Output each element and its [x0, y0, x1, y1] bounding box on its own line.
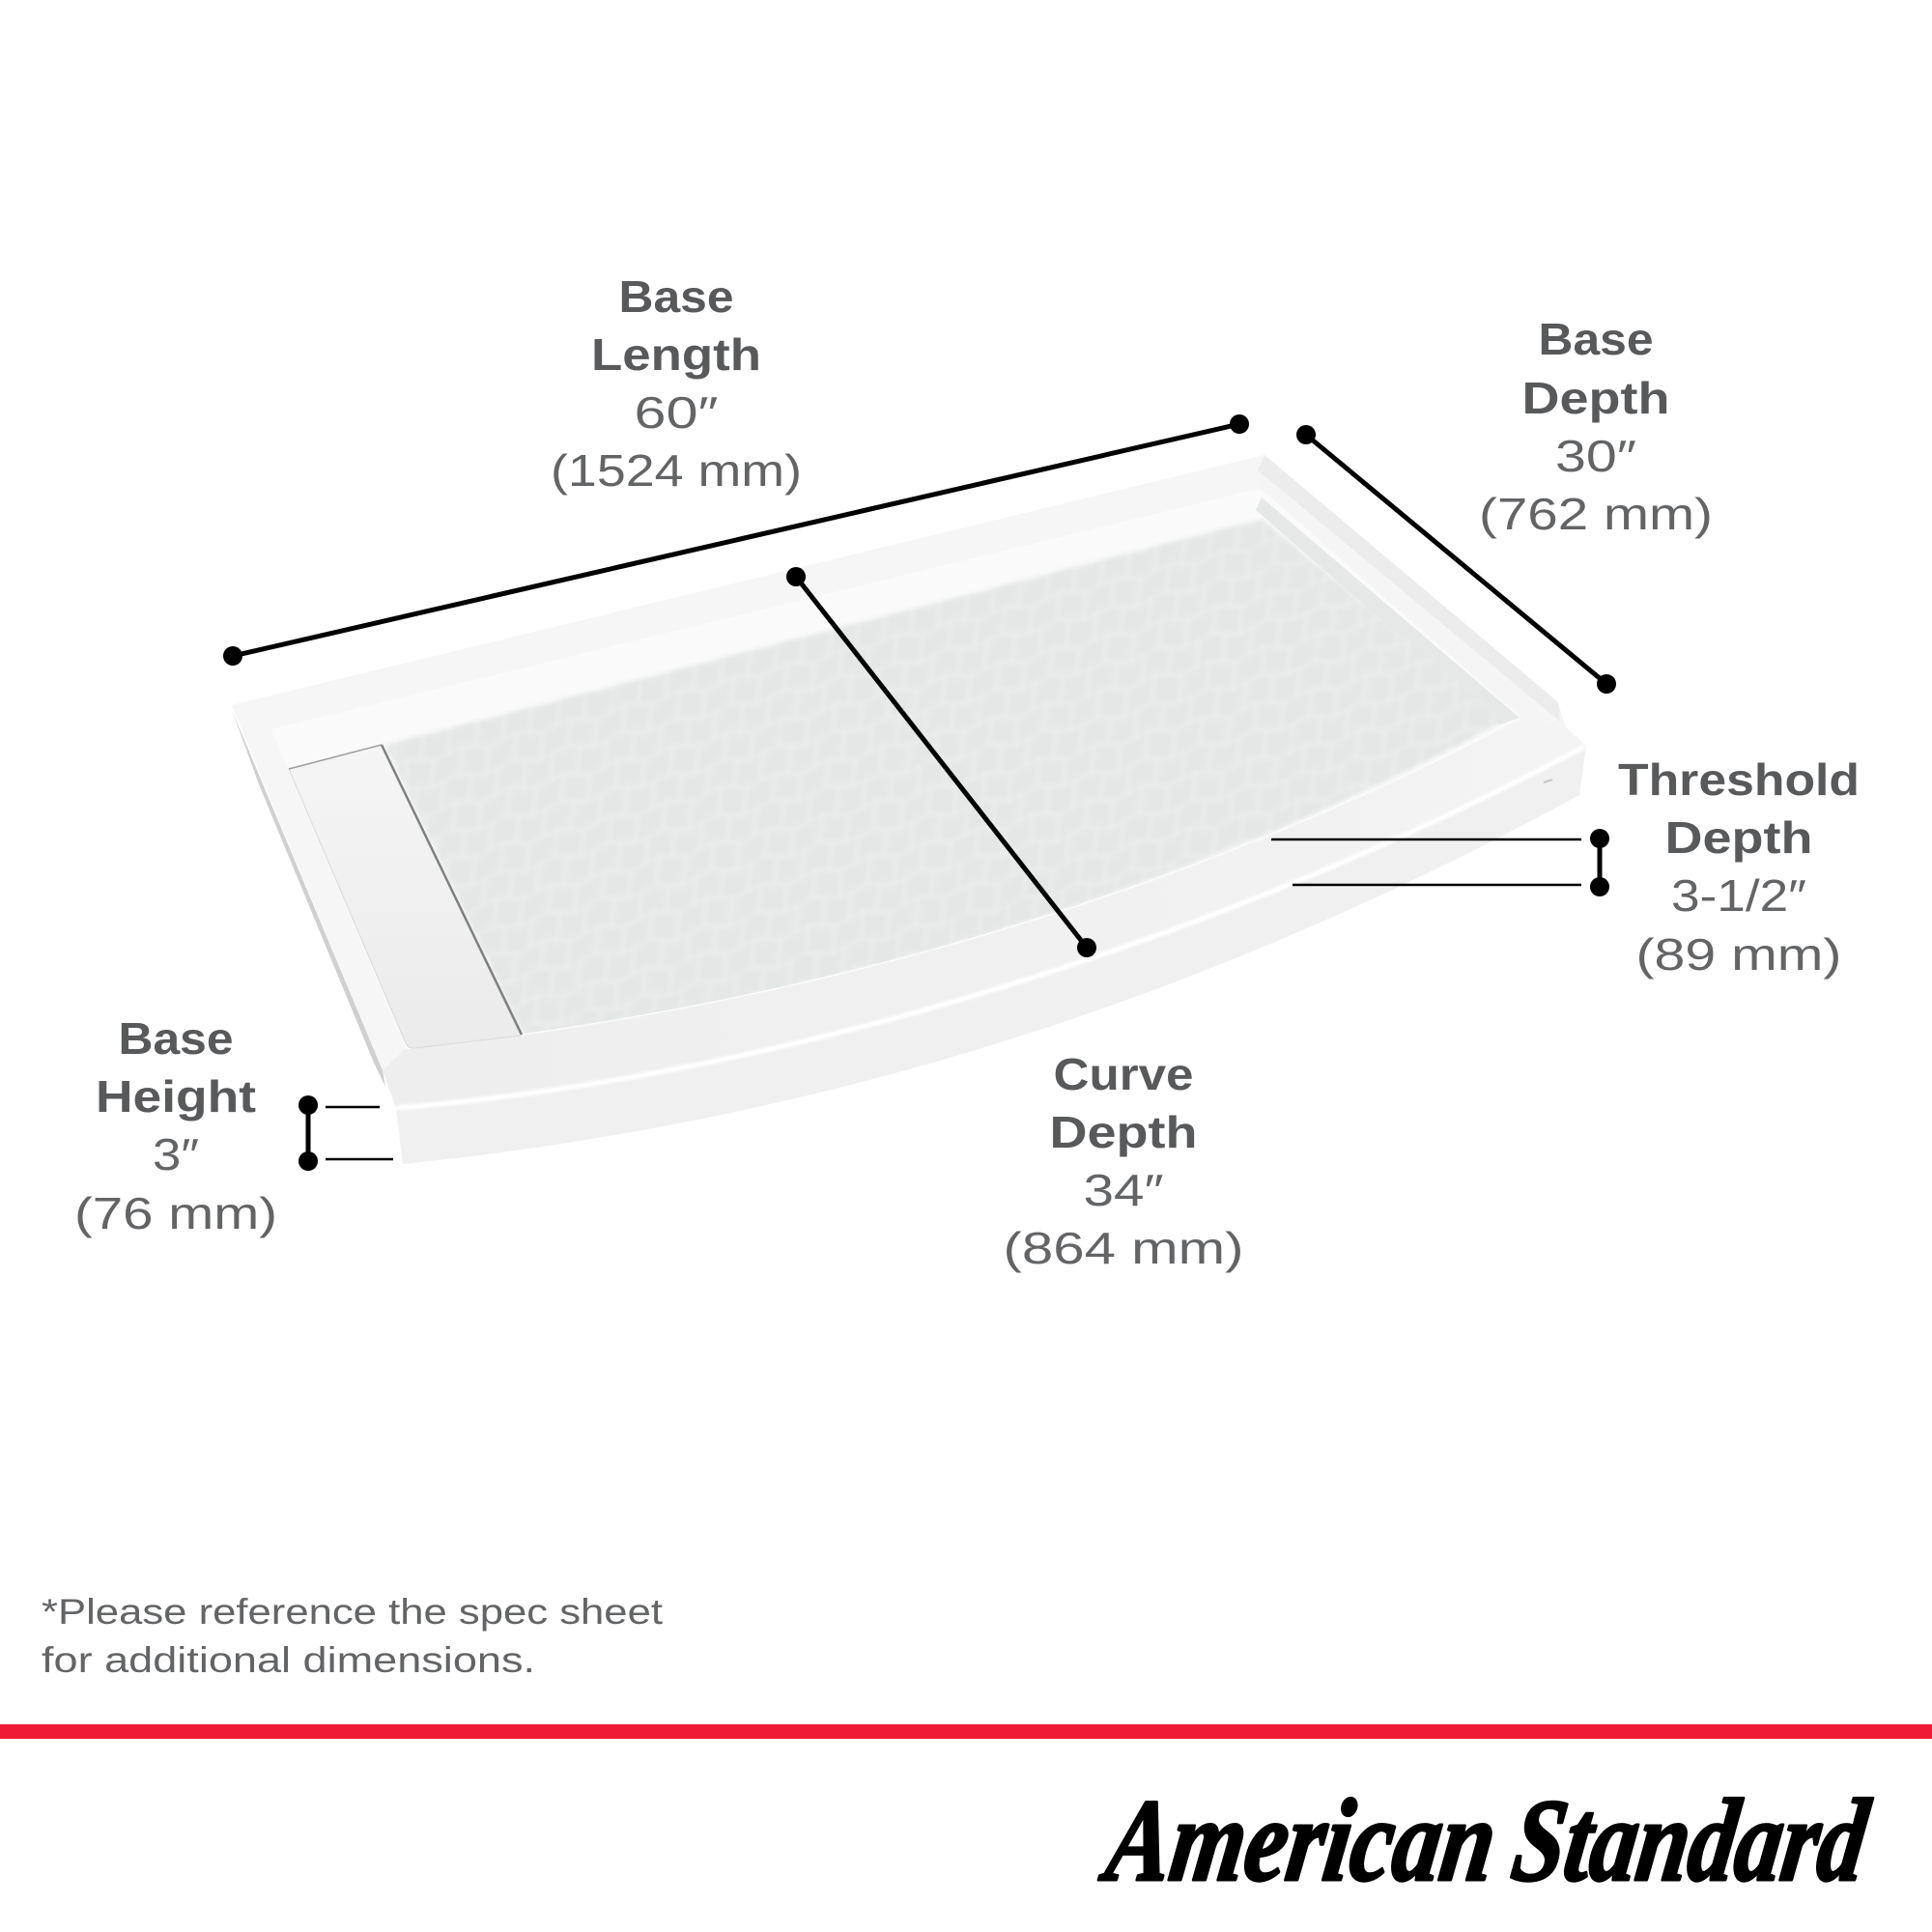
label: threshold depth: (89 mm): [1636, 929, 1841, 980]
label: base depth: 30″: [1555, 431, 1636, 481]
label: base length: Base: [618, 271, 734, 322]
label: base depth: Base: [1538, 314, 1654, 364]
drain slit: [382, 745, 522, 1035]
footnote: for additional dimensions.: [42, 1640, 535, 1680]
dimension bracket: threshold depth: [1271, 829, 1609, 896]
label: base length: [551, 271, 802, 496]
label: base length: (1524 mm): [551, 445, 802, 496]
recessed slope: [273, 490, 1520, 1048]
footnote: *Please reference the spec sheet: [42, 1592, 664, 1632]
label: base height: 3″: [153, 1129, 199, 1179]
front lip: [396, 746, 1586, 1164]
label: base depth: Depth: [1522, 373, 1669, 423]
dimension line: curve depth: [786, 567, 1096, 957]
logo: American Standard: [1094, 1776, 1877, 1906]
label: curve depth: Depth: [1049, 1107, 1198, 1157]
dimension bracket: base height: [298, 1095, 393, 1171]
logo: American Standard: American: [1094, 1776, 1504, 1906]
base outer top and front surface: [232, 455, 1586, 1164]
label: base height: Height: [96, 1071, 256, 1122]
label: threshold depth: [1618, 754, 1860, 980]
label: curve depth: Curve: [1053, 1049, 1194, 1099]
dimension line: base depth: [1296, 425, 1616, 694]
right rim outer band: [1258, 455, 1560, 722]
label: curve depth: (864 mm): [1003, 1223, 1244, 1273]
right inner shadow band: [1256, 497, 1520, 724]
label: base length: 60″: [634, 387, 719, 438]
front lip highlight: [396, 747, 1584, 1108]
right rim top: [1258, 470, 1565, 726]
label: base height: [74, 1013, 277, 1238]
textured floor: [384, 519, 1505, 1036]
shower base illustration: [232, 455, 1586, 1164]
drain cover plate: [289, 745, 521, 1048]
label: base length: Length: [591, 329, 761, 380]
label: base height: (76 mm): [74, 1188, 277, 1238]
footnote: [42, 1592, 664, 1680]
logo mark on lip: [1544, 780, 1552, 782]
base left side shadow: [232, 710, 385, 1087]
label: base depth: [1479, 314, 1713, 539]
drain cover back edge: [289, 745, 382, 769]
back rim light band: [232, 455, 1264, 1070]
label: threshold depth: 3-1/2″: [1671, 870, 1806, 921]
dimension line: base length: [223, 414, 1249, 666]
label: curve depth: [1003, 1049, 1244, 1273]
label: threshold depth: Threshold: [1618, 754, 1860, 805]
label: base depth: (762 mm): [1479, 489, 1713, 539]
label: curve depth: 34″: [1084, 1165, 1163, 1215]
label: threshold depth: Depth: [1665, 812, 1812, 863]
label: base height: Base: [118, 1013, 234, 1064]
red divider bar: [0, 1724, 1932, 1739]
